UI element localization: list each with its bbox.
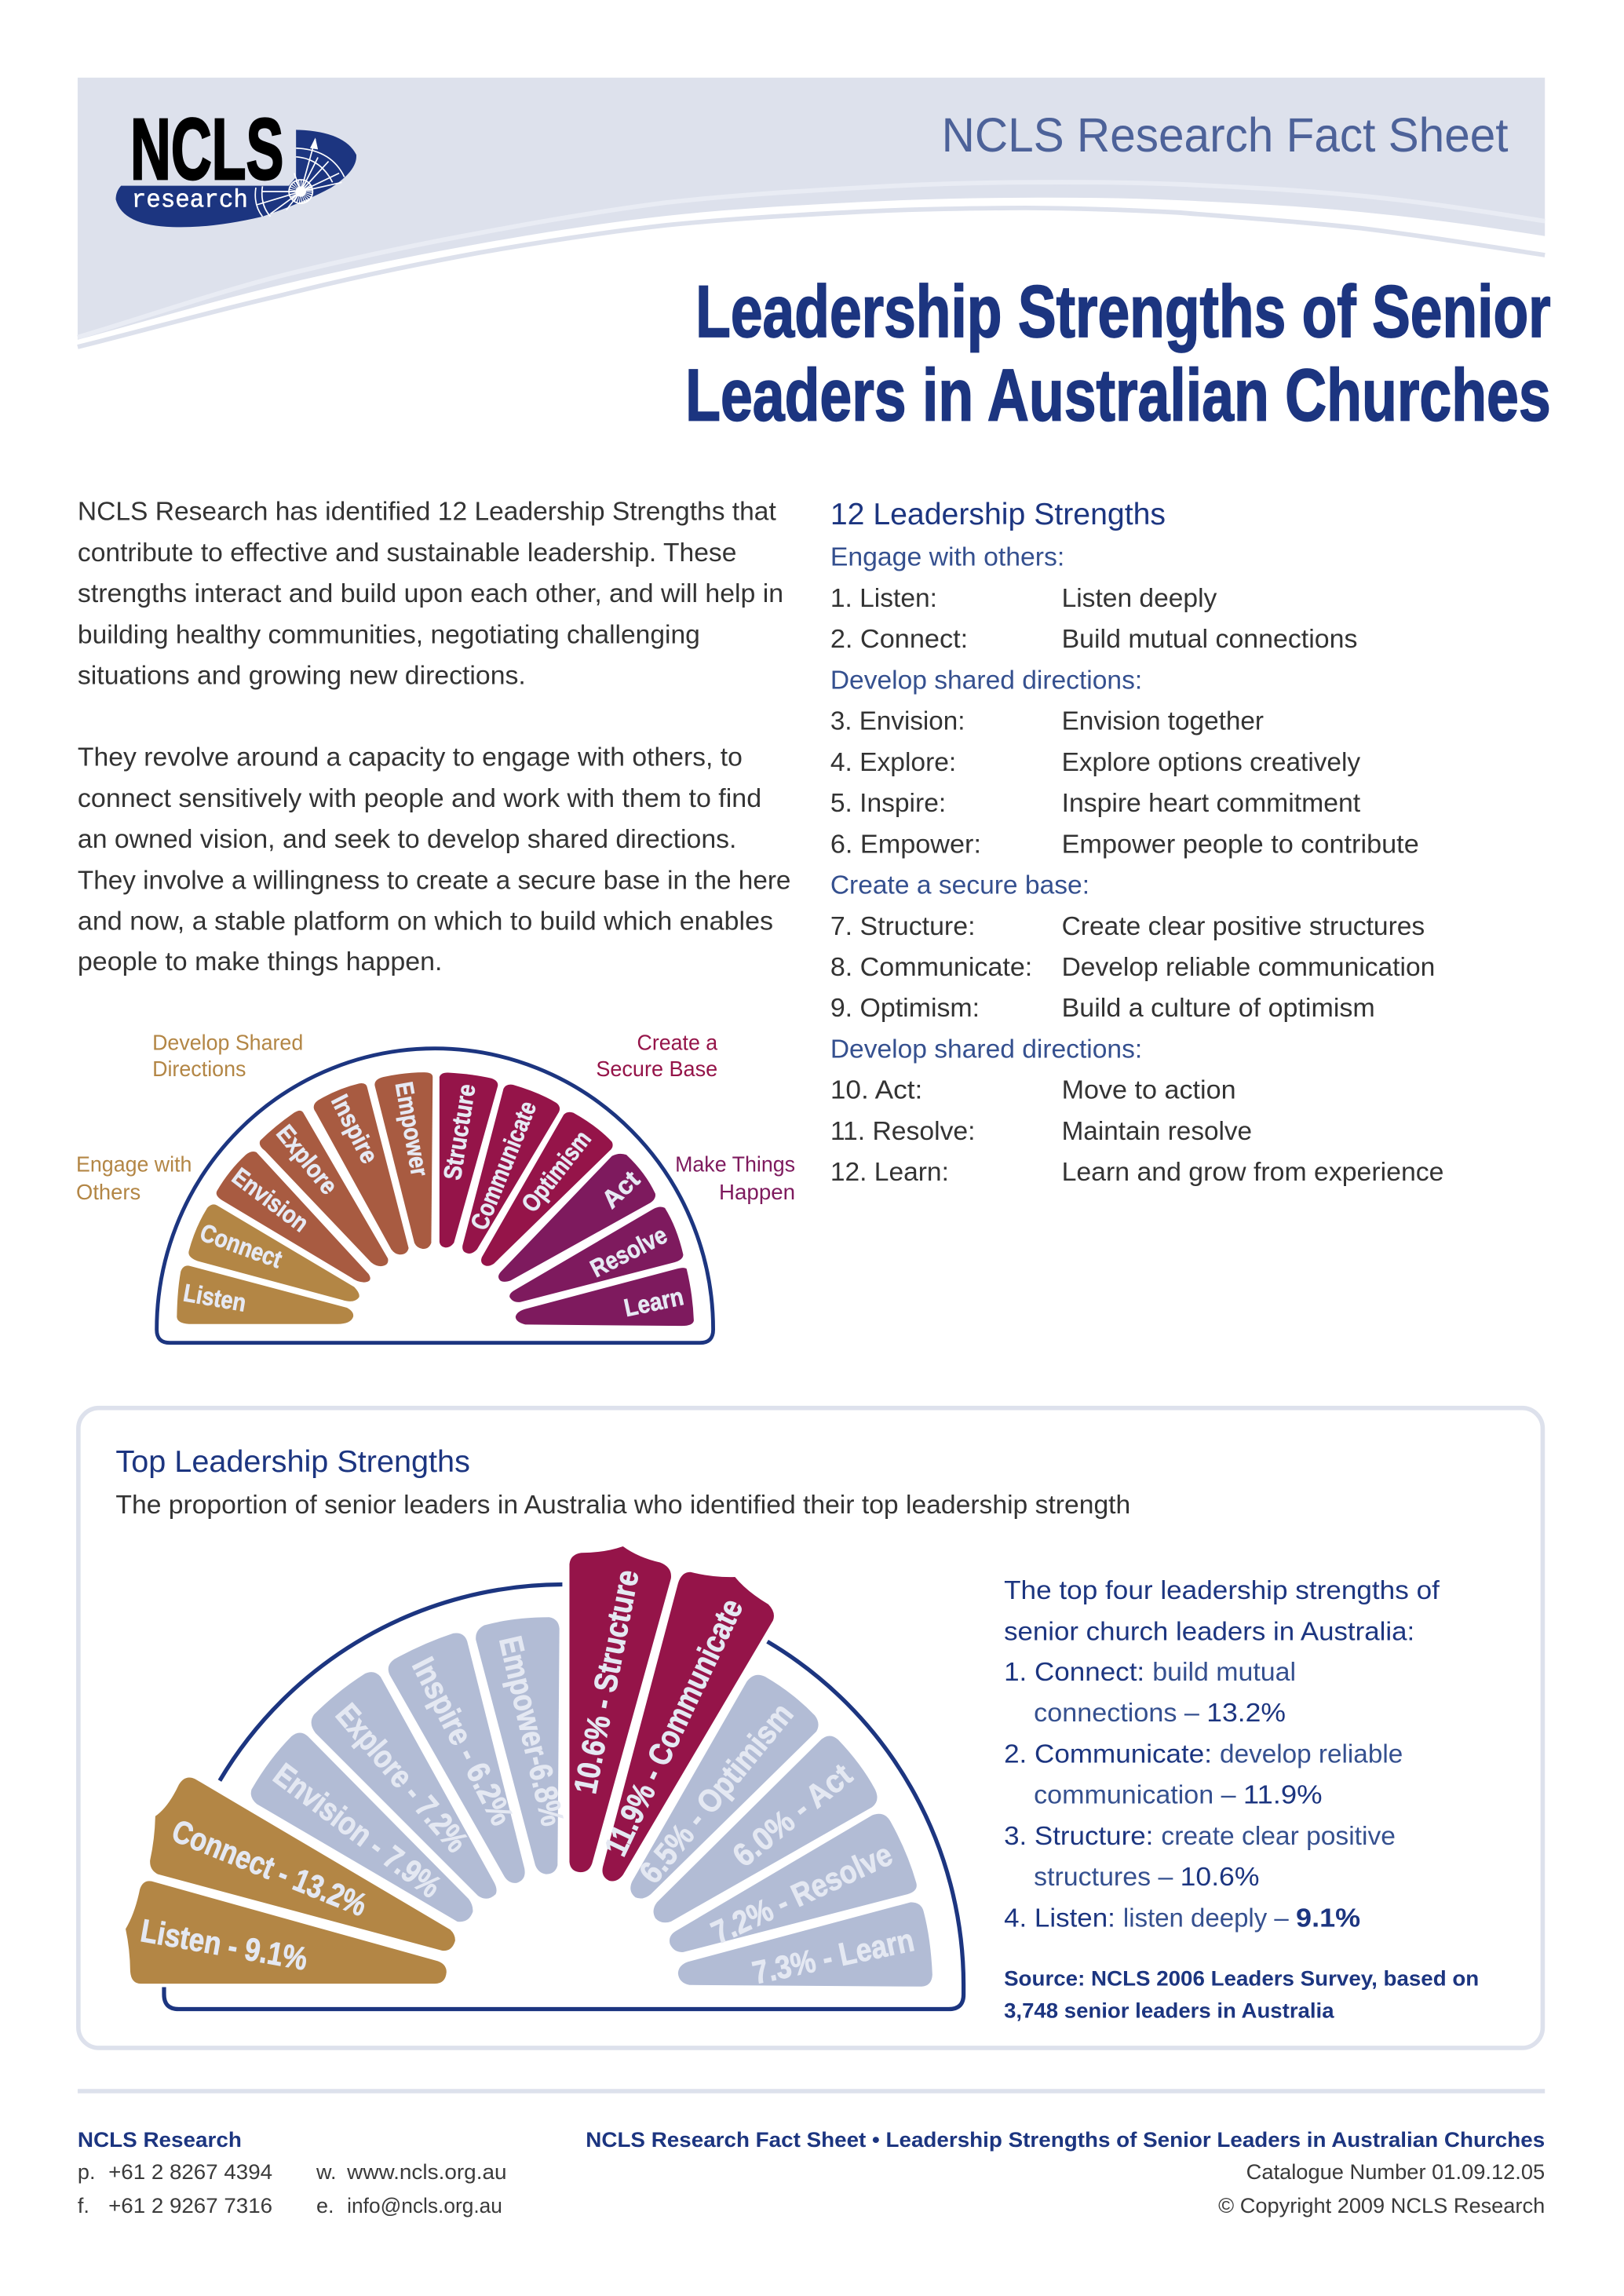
list: 12 leadership strengths: 4. Explore: bbox=[830, 748, 956, 777]
source note bbox=[1004, 1967, 1479, 2023]
header label: NCLS Research Fact Sheet bbox=[942, 108, 1509, 162]
panel subheading: The proportion of senior leaders in Australia who identified their top leadership strength bbox=[115, 1491, 1130, 1520]
chart: leadership strengths arch: Resolve bbox=[586, 1221, 671, 1283]
footer contact details: +61 2 9267 7316 bbox=[108, 2194, 272, 2218]
intro paragraph one: strengths interact and build upon each other, and will help in bbox=[78, 579, 783, 608]
intro paragraph two bbox=[78, 743, 790, 976]
list: 12 leadership strengths: Build a culture of optimism bbox=[1062, 994, 1375, 1023]
category label: Develop Shared Directions: Directions bbox=[152, 1057, 246, 1081]
list: 12 leadership strengths: 12. Learn: bbox=[830, 1158, 949, 1187]
intro paragraph one: situations and growing new directions. bbox=[78, 662, 526, 691]
category label: Develop Shared Directions bbox=[152, 1031, 303, 1081]
chart: leadership strengths arch: Communicate bbox=[465, 1097, 542, 1234]
list: 12 leadership strengths: Inspire heart commitment bbox=[1062, 789, 1361, 818]
intro paragraph two: an owned vision, and seek to develop shared directions. bbox=[78, 825, 736, 854]
chart: top strengths arch bbox=[126, 1546, 964, 2009]
list: 12 leadership strengths: 2. Connect: bbox=[830, 625, 968, 654]
source note: Source: NCLS 2006 Leaders Survey, based on bbox=[1004, 1967, 1479, 1991]
chart: leadership strengths arch: Envision bbox=[227, 1162, 314, 1237]
intro paragraph one bbox=[78, 498, 783, 691]
list: 12 leadership strengths: 10. Act: bbox=[830, 1076, 922, 1105]
footer contact details: NCLS Research bbox=[78, 2128, 242, 2152]
chart: top strengths arch: Envision - 7.9% bbox=[267, 1756, 447, 1905]
footer contact details: +61 2 8267 4394 bbox=[108, 2160, 272, 2184]
top four summary: 2. Communicate: bbox=[1004, 1739, 1212, 1769]
chart: top strengths arch: 7.3% - Learn bbox=[750, 1922, 918, 1991]
chart: leadership strengths arch bbox=[157, 1049, 713, 1343]
top four summary: senior church leaders in Australia: bbox=[1004, 1617, 1414, 1646]
chart: top strengths arch: Explore - 7.2% bbox=[329, 1696, 475, 1859]
source note: 3,748 senior leaders in Australia bbox=[1004, 1999, 1335, 2023]
category label: Develop Shared Directions: Develop Shared bbox=[152, 1031, 303, 1055]
chart: leadership strengths arch: Explore bbox=[271, 1119, 344, 1199]
list: 12 leadership strengths: 5. Inspire: bbox=[830, 789, 946, 818]
list: 12 leadership strengths: Explore options creatively bbox=[1062, 748, 1360, 777]
list: 12 leadership strengths: Empower people to contribute bbox=[1062, 830, 1419, 859]
list: 12 leadership strengths: Listen deeply bbox=[1062, 584, 1217, 613]
chart: top strengths arch: 11.9% - Communicate bbox=[597, 1593, 750, 1861]
logo: NCLS research bbox=[116, 101, 356, 227]
list: 12 leadership strengths: Develop shared directions: bbox=[830, 1035, 1142, 1064]
list: 12 leadership strengths: Move to action bbox=[1062, 1076, 1236, 1105]
top four summary: listen deeply – bbox=[1123, 1904, 1289, 1933]
list: 12 leadership strengths: 6. Empower: bbox=[830, 830, 981, 859]
category label: Make Things Happen: Make Things bbox=[675, 1152, 795, 1176]
footer publication details: © Copyright 2009 NCLS Research bbox=[1218, 2194, 1545, 2218]
intro paragraph two: They involve a willingness to create a secure base in the here bbox=[78, 866, 790, 895]
category label: Engage with Others bbox=[76, 1152, 192, 1204]
chart: leadership strengths arch: Structure bbox=[438, 1082, 481, 1182]
top four summary: The top four leadership strengths of bbox=[1004, 1576, 1440, 1605]
footer contact details: p. bbox=[78, 2160, 95, 2184]
list: 12 leadership strengths bbox=[830, 498, 1443, 1187]
list: 12 leadership strengths: 7. Structure: bbox=[830, 912, 976, 941]
chart: leadership strengths arch: Connect bbox=[196, 1217, 286, 1273]
list: 12 leadership strengths: 8. Communicate: bbox=[830, 953, 1032, 982]
footer contact details: f. bbox=[78, 2194, 89, 2218]
chart: top strengths arch: 6.5% - Optimism bbox=[632, 1696, 800, 1890]
top four summary: 3. Structure: bbox=[1004, 1822, 1153, 1851]
list: 12 leadership strengths: Envision together bbox=[1062, 707, 1264, 736]
list: 12 leadership strengths: Create clear positive structures bbox=[1062, 912, 1425, 941]
top four summary: 13.2% bbox=[1206, 1699, 1286, 1728]
header band bbox=[78, 78, 1545, 347]
category label: Engage with Others: Engage with bbox=[76, 1152, 192, 1176]
footer contact details: e. bbox=[316, 2194, 334, 2218]
footer publication details bbox=[586, 2128, 1545, 2218]
logo: NCLS research: research bbox=[132, 186, 248, 214]
intro paragraph one: building healthy communities, negotiating challenging bbox=[78, 620, 700, 649]
chart: leadership strengths arch: Inspire bbox=[326, 1090, 384, 1168]
list: 12 leadership strengths: Create a secure base: bbox=[830, 871, 1089, 900]
list: 12 leadership strengths: Build mutual connections bbox=[1062, 625, 1357, 654]
chart: leadership strengths arch: Optimism bbox=[516, 1125, 597, 1217]
footer contact details: www.ncls.org.au bbox=[346, 2160, 507, 2184]
chart: leadership strengths arch: Listen bbox=[181, 1278, 248, 1317]
footer publication details: Catalogue Number 01.09.12.05 bbox=[1246, 2160, 1545, 2184]
footer contact details bbox=[78, 2128, 507, 2218]
list: 12 leadership strengths: Learn and grow from experience bbox=[1062, 1158, 1443, 1187]
intro paragraph two: people to make things happen. bbox=[78, 947, 442, 976]
panel heading: Top Leadership Strengths bbox=[115, 1445, 470, 1479]
chart: top strengths arch: Connect - 13.2% bbox=[167, 1812, 372, 1923]
chart: top strengths arch: 10.6% - Structure bbox=[567, 1567, 646, 1797]
list: 12 leadership strengths: Develop reliable communication bbox=[1062, 953, 1435, 982]
top four summary: build mutual bbox=[1152, 1658, 1296, 1687]
chart: leadership strengths arch: Learn bbox=[622, 1282, 686, 1322]
chart: top strengths arch: Listen - 9.1% bbox=[138, 1912, 310, 1977]
list: 12 leadership strengths: 12 Leadership Strengths bbox=[830, 498, 1166, 531]
panel: top leadership strengths bbox=[78, 1408, 1542, 2048]
footer contact details: w. bbox=[316, 2160, 337, 2184]
top four summary: 9.1% bbox=[1296, 1904, 1360, 1933]
category label: Engage with Others: Others bbox=[76, 1180, 141, 1204]
list: 12 leadership strengths: 1. Listen: bbox=[830, 584, 937, 613]
logo: NCLS research: NCLS bbox=[130, 101, 283, 198]
top four summary: 4. Listen: bbox=[1004, 1904, 1115, 1933]
top four summary: create clear positive bbox=[1161, 1822, 1396, 1851]
intro paragraph one: NCLS Research has identified 12 Leadership Strengths that bbox=[78, 498, 776, 527]
list: 12 leadership strengths: 9. Optimism: bbox=[830, 994, 980, 1023]
chart: top strengths arch: 7.2% - Resolve bbox=[706, 1836, 898, 1951]
top four summary: 1. Connect: bbox=[1004, 1658, 1144, 1687]
category label: Make Things Happen: Happen bbox=[719, 1180, 795, 1204]
category label: Create a Secure Base bbox=[596, 1031, 718, 1081]
list: 12 leadership strengths: Develop shared directions: bbox=[830, 666, 1142, 695]
top four summary: structures – bbox=[1034, 1863, 1173, 1892]
chart: top strengths arch: Empower-6.8% bbox=[492, 1633, 571, 1829]
chart: leadership strengths arch: Empower bbox=[390, 1079, 434, 1178]
chart: leadership strengths arch: Act bbox=[596, 1165, 645, 1214]
list: 12 leadership strengths: Maintain resolve bbox=[1062, 1117, 1252, 1146]
intro paragraph one: contribute to effective and sustainable leadership. These bbox=[78, 538, 736, 568]
list: 12 leadership strengths: 11. Resolve: bbox=[830, 1117, 976, 1146]
category label: Make Things Happen bbox=[675, 1152, 795, 1204]
chart: top strengths arch: 6.0% - Act bbox=[726, 1756, 859, 1874]
list: 12 leadership strengths: 3. Envision: bbox=[830, 707, 965, 736]
top four summary: connections – bbox=[1034, 1699, 1199, 1728]
category label: Create a Secure Base: Create a bbox=[637, 1031, 718, 1055]
title bbox=[685, 271, 1551, 436]
intro paragraph two: connect sensitively with people and work with them to find bbox=[78, 784, 761, 813]
intro paragraph two: and now, a stable platform on which to build which enables bbox=[78, 907, 773, 936]
list: 12 leadership strengths: Engage with others: bbox=[830, 543, 1064, 572]
top four summary: develop reliable bbox=[1220, 1739, 1403, 1769]
category label: Create a Secure Base: Secure Base bbox=[596, 1057, 717, 1081]
intro paragraph two: They revolve around a capacity to engage with others, to bbox=[78, 743, 743, 772]
top four summary: 11.9% bbox=[1243, 1781, 1323, 1810]
top four summary: 10.6% bbox=[1181, 1863, 1259, 1892]
footer publication details: NCLS Research Fact Sheet • Leadership Strengths of Senior Leaders in Australian Churches bbox=[586, 2128, 1545, 2152]
top four summary bbox=[1004, 1576, 1440, 1933]
chart: top strengths arch: Inspire - 6.2% bbox=[405, 1652, 520, 1831]
footer contact details: info@ncls.org.au bbox=[347, 2194, 502, 2218]
top four summary: communication – bbox=[1034, 1781, 1236, 1810]
